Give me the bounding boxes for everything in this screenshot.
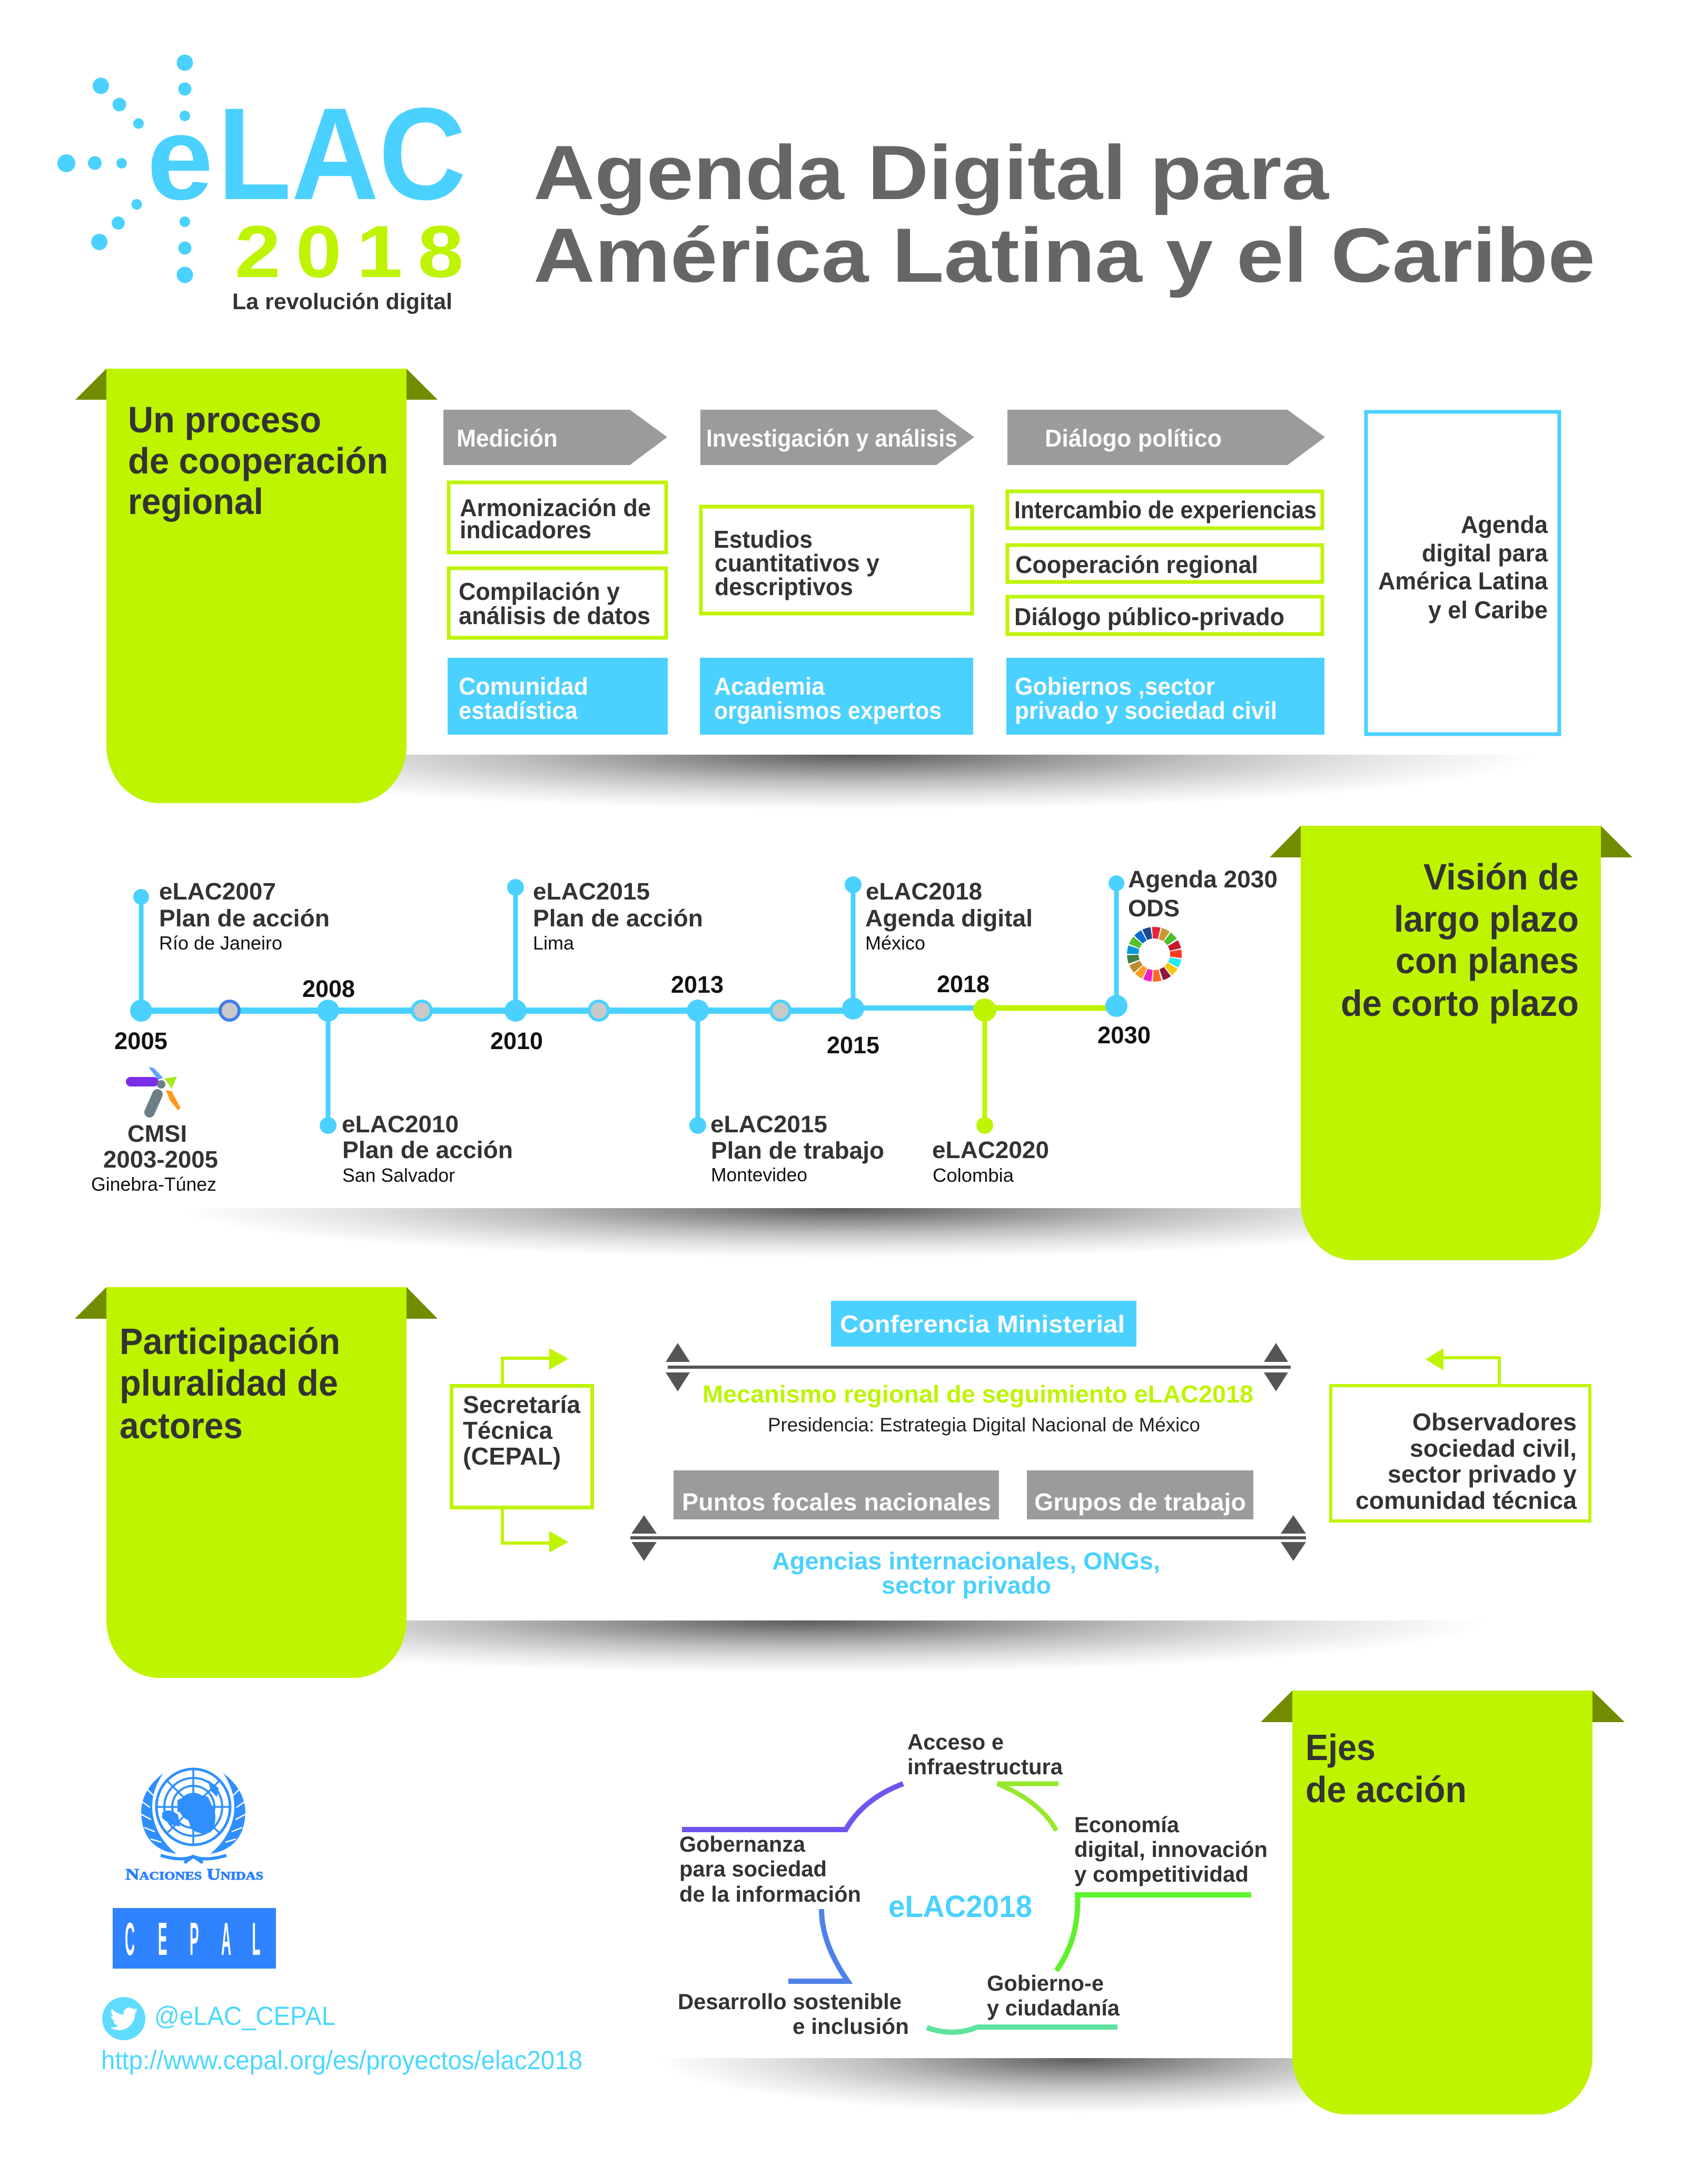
- box: Diálogo público-privado: Diálogo público-privado: [1014, 603, 1284, 630]
- label: Gobierno-e: y ciudadanía: [987, 1995, 1120, 2020]
- heading: Participación pluralidad de actores: Participación: [120, 1321, 340, 1362]
- arrow: Investigación y análisis: [700, 410, 974, 465]
- arrow: Diálogo político: Diálogo político: [1045, 424, 1222, 452]
- label: Acceso e infraestructura: [907, 1730, 1063, 1779]
- box: Observadores: sociedad civil,: [1410, 1435, 1577, 1462]
- milestone: eLAC2015 Montevideo: Plan de trabajo: [711, 1137, 884, 1164]
- box: Puntos focales nacionales: [674, 1470, 999, 1519]
- box: Agenda digital para América Latina y el Caribe: América Latina: [1378, 567, 1548, 595]
- arrow: Secretaría down: [502, 1509, 568, 1553]
- label: Gobernanza: de la información: [679, 1882, 861, 1906]
- milestone: Agenda 2030: [1128, 866, 1278, 922]
- milestone: eLAC2020: eLAC2020: [932, 1137, 1049, 1163]
- timeline year labels: 2018: [937, 971, 990, 997]
- label: Desarrollo sostenible: [678, 1989, 909, 2039]
- icon: radiating dots: [57, 55, 193, 283]
- ribbon one: [75, 369, 438, 803]
- heading: Un proceso de cooperación regional: regional: [128, 481, 263, 522]
- label: Acceso e infraestructura: Acceso e: [907, 1730, 1004, 1754]
- box: Academia organismos expertos: Academia: [714, 673, 825, 700]
- diagram: action axes: [678, 1730, 1268, 2039]
- milestone: Agenda 2030: ODS: [1128, 895, 1180, 922]
- icon: twitter: [102, 1997, 145, 2040]
- milestone: CMSI 2003-2005: 2003-2005: [103, 1146, 218, 1173]
- text: Presidencia: Presidencia: Estrategia Digital Nacional de México: [768, 1414, 1200, 1436]
- box: Observadores: comunidad técnica: [1355, 1487, 1577, 1514]
- text: Agencias internacionales: [772, 1547, 1160, 1599]
- double arrow: lower bar: [630, 1515, 1306, 1561]
- box: Comunidad estadística: Comunidad: [459, 673, 588, 700]
- curve: governance: [682, 1784, 903, 1830]
- panel: Un proceso de cooperación regional: [75, 369, 1559, 810]
- logo wordmark: LAC: [217, 81, 466, 227]
- label: Acceso e infraestructura: infraestructura: [907, 1754, 1063, 1779]
- ribbon three: [75, 1287, 438, 1678]
- heading: Visión de largo plazo con planes de corto plazo: [1341, 856, 1579, 1024]
- box: Intercambio de experiencias: Intercambio de experiencias: [1014, 496, 1317, 523]
- box: Intercambio de experiencias: [1007, 491, 1322, 528]
- text: Mecanismo regional de seguimiento: Mecanismo regional de seguimiento eLAC2018: [702, 1380, 1253, 1408]
- shadow under panel two: [179, 1208, 1506, 1258]
- panel: Ejes de acción: [657, 1691, 1625, 2114]
- arrow: Medición: Medición: [457, 424, 558, 452]
- box: Academia organismos expertos: [700, 658, 973, 735]
- box: Comunidad estadística: estadística: [459, 697, 578, 724]
- box: Estudios cuantitativos y descriptivos: cuantitativos y: [715, 549, 879, 577]
- heading: Participación pluralidad de actores: actores: [120, 1405, 243, 1446]
- shadow under panel four: [657, 2058, 1500, 2113]
- icon: United Nations emblem: [141, 1769, 245, 1863]
- timeline year labels: 2015: [827, 1032, 879, 1059]
- milestone: eLAC2015 Montevideo: Montevideo: [711, 1164, 807, 1185]
- heading: Visión de largo plazo con planes de corto plazo: de corto plazo: [1341, 983, 1579, 1024]
- logo wordmark: e: [147, 91, 213, 224]
- column: Investigación y análisis: [700, 410, 974, 735]
- label: Economía digital: Economía: [1074, 1812, 1180, 1837]
- box: Diálogo público-privado: [1007, 597, 1322, 634]
- box: Agenda digital para América Latina y el Caribe: Agenda: [1461, 511, 1548, 538]
- title: Agenda Digital para: [533, 130, 1330, 215]
- heading: Visión de largo plazo con planes de corto plazo: largo plazo: [1394, 898, 1579, 940]
- timeline intermediate markers: [220, 1001, 790, 1020]
- milestone: CMSI 2003-2005: [91, 1120, 218, 1195]
- box: Armonización de indicadores: Armonización de: [460, 494, 651, 521]
- milestone: eLAC2020: Colombia: [933, 1164, 1014, 1186]
- milestone: eLAC2015 Lima: [533, 878, 703, 954]
- milestone: eLAC2007: Río de Janeiro: [159, 932, 282, 954]
- arrow: Secretaría up: [502, 1348, 568, 1384]
- milestone: eLAC2015 Lima: eLAC2015: [533, 878, 650, 905]
- label: Economía digital: [1074, 1812, 1268, 1886]
- heading: Ejes de acción: de acción: [1305, 1769, 1467, 1810]
- box: Secretaría Técnica (CEPAL): (CEPAL): [463, 1442, 561, 1470]
- milestone: eLAC2015 Montevideo: [710, 1111, 884, 1185]
- box: Compilación y análisis de datos: [449, 568, 666, 638]
- box: Puntos focales nacionales: Puntos focales nacionales: [682, 1488, 991, 1516]
- heading: Ejes de acción: [1305, 1727, 1467, 1810]
- milestone: eLAC2010: eLAC2010: [342, 1111, 459, 1138]
- milestone: eLAC2018: México: [865, 932, 925, 954]
- arrow: Investigación y análisis: Investigación y análisis: [706, 424, 957, 452]
- heading: Participación pluralidad de actores: pluralidad de: [120, 1362, 338, 1404]
- label: Gobierno-e: Gobierno-e: [987, 1971, 1104, 1995]
- heading: Visión de largo plazo con planes de corto plazo: Visión de: [1423, 856, 1579, 897]
- column: Medición: [443, 410, 668, 735]
- label: Economía digital: digital, innovación: [1074, 1837, 1268, 1862]
- label: Desarrollo sostenible: e inclusión: [793, 2014, 909, 2039]
- box: Gobiernos, sector privado y sociedad civil: privado y sociedad civil: [1015, 697, 1277, 724]
- heading: Un proceso de cooperación regional: Un proceso: [128, 399, 321, 440]
- timeline year labels: 2010: [490, 1027, 543, 1054]
- timeline year labels: 2008: [302, 975, 355, 1002]
- label: Gobernanza: Gobernanza: [679, 1832, 806, 1856]
- milestone: eLAC2018: Agenda digital: [865, 905, 1033, 932]
- box: Gobiernos, sector privado y sociedad civil: Gobiernos ,sector: [1015, 673, 1215, 700]
- shadow under panel three: [117, 1620, 1487, 1673]
- box: Observadores: Observadores: [1412, 1408, 1577, 1436]
- title: [533, 130, 1595, 298]
- title: América Latina y el Caribe: [533, 212, 1595, 298]
- text: Agencias internacionales: Agencias internacionales, ONGs,: [772, 1547, 1160, 1575]
- icon: ODS wheel: [1124, 924, 1185, 985]
- box: Agenda digital para América Latina y el Caribe: digital para: [1422, 539, 1548, 567]
- milestone: eLAC2010: San Salvador: [342, 1164, 455, 1186]
- milestone: eLAC2007: [159, 878, 330, 954]
- milestone: CMSI 2003-2005: Ginebra-Túnez: [91, 1173, 216, 1195]
- label: Economía digital: y competitividad: [1074, 1862, 1249, 1886]
- curve: sustainable development: [788, 1909, 848, 1981]
- box: Armonización de indicadores: [449, 482, 666, 552]
- logo: CEPAL: CEPAL: [125, 1913, 261, 1965]
- box: Estudios cuantitativos y descriptivos: [701, 507, 972, 614]
- ribbon four: [1261, 1691, 1625, 2114]
- milestone: Agenda 2030: Agenda 2030: [1128, 866, 1278, 893]
- box: Secretaría Técnica (CEPAL): Técnica: [463, 1417, 552, 1444]
- box: Armonización de indicadores: indicadores: [460, 516, 591, 543]
- heading: Ejes de acción: Ejes: [1305, 1727, 1376, 1768]
- box: Grupos de trabajo: [1027, 1470, 1253, 1519]
- box: Compilación y análisis de datos: análisis de datos: [459, 602, 650, 629]
- curve: access: [997, 1784, 1058, 1831]
- footer logos and links: [101, 1769, 582, 2075]
- timeline year labels: 2005: [114, 1027, 167, 1054]
- box: Estudios cuantitativos y descriptivos: Estudios: [714, 526, 813, 553]
- box: Gobiernos, sector privado y sociedad civil: [1006, 658, 1324, 735]
- label: Gobernanza: para sociedad: [679, 1856, 827, 1881]
- milestone: eLAC2015 Montevideo: eLAC2015: [710, 1111, 827, 1138]
- heading: Un proceso de cooperación regional: de cooperación: [128, 440, 388, 481]
- timeline year labels: 2013: [671, 971, 724, 998]
- box: Compilación y análisis de datos: Compilación y: [459, 578, 620, 605]
- double arrow: upper bar: [666, 1343, 1291, 1391]
- box: Comunidad estadística: [448, 658, 668, 735]
- box: Agenda digital para América Latina y el Caribe: [1366, 412, 1559, 734]
- box: Observadores: sector privado y: [1388, 1460, 1577, 1488]
- text: twitter handle: @eLAC_CEPAL: [154, 2001, 335, 2031]
- curve: economy: [1056, 1895, 1251, 1971]
- milestone: eLAC2018: [865, 878, 1033, 954]
- timeline year labels: [114, 971, 1151, 1059]
- label: Gobierno-e: [987, 1971, 1120, 2020]
- box: Grupos de trabajo: Grupos de trabajo: [1034, 1488, 1246, 1516]
- label: eLAC2018 center: eLAC2018: [888, 1890, 1032, 1924]
- arrow: Diálogo político: [1007, 410, 1325, 465]
- icon: CMSI logo: [131, 1067, 181, 1112]
- box: Conferencia Ministerial: Conferencia Ministerial: [840, 1310, 1125, 1338]
- shadow under panel one: [169, 755, 1538, 810]
- milestone: eLAC2015 Lima: Lima: [533, 932, 575, 954]
- milestone: eLAC2010: [342, 1111, 513, 1186]
- milestone: CMSI 2003-2005: CMSI: [127, 1120, 187, 1147]
- box: Conferencia Ministerial: [831, 1301, 1136, 1347]
- arrow: Observadores: [1426, 1348, 1499, 1384]
- label: Gobernanza: [679, 1832, 861, 1906]
- ribbon two: [1270, 826, 1632, 1260]
- milestone: eLAC2010: Plan de acción: [342, 1137, 513, 1163]
- milestone: eLAC2007: Plan de acción: [159, 905, 330, 932]
- box: Estudios cuantitativos y descriptivos: descriptivos: [715, 573, 853, 600]
- text: Naciones Unidas: Naciones Unidas: [125, 1865, 263, 1883]
- box: Secretaría Técnica (CEPAL): [452, 1386, 592, 1507]
- logo tagline: La revolución digital: [232, 289, 452, 314]
- milestone: eLAC2020: [932, 1137, 1049, 1186]
- box: Observadores: [1331, 1386, 1590, 1521]
- milestone: eLAC2015 Lima: Plan de acción: [533, 905, 703, 932]
- timeline chart: [91, 866, 1278, 1195]
- milestone: eLAC2018: eLAC2018: [866, 878, 982, 905]
- arrow: Medición: [443, 410, 667, 465]
- box: Academia organismos expertos: organismos expertos: [714, 697, 942, 724]
- timeline nodes: [130, 875, 1127, 1134]
- text: website: http://www.cepal.org/es/proyectos/elac2018: [101, 2045, 582, 2075]
- heading: Un proceso de cooperación regional: [128, 399, 388, 522]
- timeline axis: [141, 883, 1116, 1125]
- box: Cooperación regional: Cooperación regional: [1015, 551, 1258, 578]
- box: Secretaría Técnica (CEPAL): Secretaría: [463, 1391, 580, 1418]
- panel: Participación y pluralidad de actores: [75, 1287, 1590, 1678]
- label: Desarrollo sostenible: Desarrollo sostenible: [678, 1989, 902, 2014]
- logo: eLAC 2018: [57, 55, 466, 314]
- timeline year labels: 2030: [1097, 1022, 1151, 1049]
- logo year: 2018: [235, 211, 463, 293]
- panel: Visión de largo plazo: [91, 826, 1632, 1260]
- column: Diálogo político: [1006, 410, 1325, 735]
- milestone: eLAC2007: eLAC2007: [159, 878, 276, 905]
- curve: e-government: [927, 2027, 1117, 2032]
- heading: Participación pluralidad de actores: [120, 1321, 340, 1446]
- box: Agenda digital para América Latina y el Caribe: y el Caribe: [1428, 596, 1548, 624]
- heading: Visión de largo plazo con planes de corto plazo: con planes: [1396, 940, 1579, 981]
- text: Agencias internacionales: sector privado: [882, 1572, 1051, 1599]
- box: Cooperación regional: [1007, 545, 1322, 582]
